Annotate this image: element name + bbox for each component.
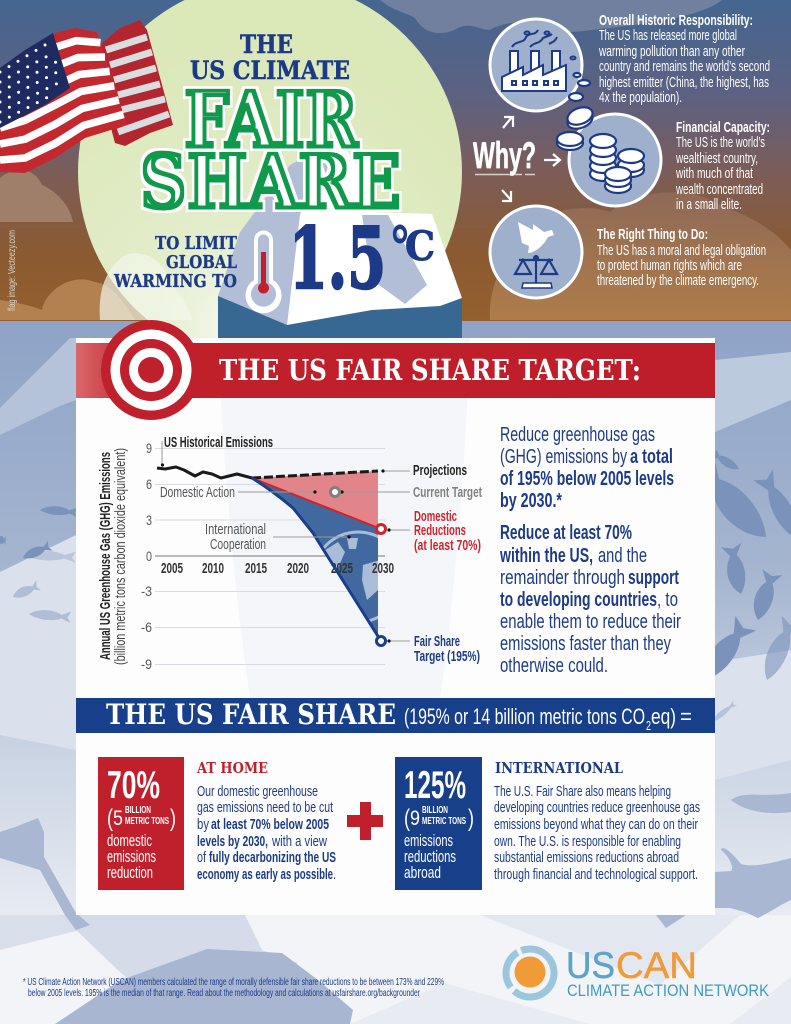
x axis labels: 2020: [287, 560, 309, 577]
chart labels: [160, 435, 482, 665]
text: target description: otherwise could.: [500, 655, 608, 677]
footnote: [23, 977, 444, 999]
leaders: [161, 441, 410, 643]
footnote: * US Climate Action Network (USCAN) members calculated the range of morally defensible fair share reductions to be between 173% and 229%: [23, 977, 444, 988]
text: target description: (GHG) emissions by: [500, 446, 627, 468]
heading band: fair share: THE US FAIR SHARE: [106, 698, 396, 731]
projection dashed line: [252, 471, 378, 478]
title: US CLIMATE: [190, 56, 350, 85]
fish school: [0, 449, 791, 725]
text: at home: AT HOME: [196, 759, 268, 777]
stat box: 125%: 9: [410, 807, 420, 830]
text: at home: economy as early as possible: [197, 866, 333, 883]
stat box: 125%: abroad: [404, 863, 441, 882]
stat box: 70%: METRIC TONS: [125, 816, 169, 827]
text: target description: support: [628, 567, 679, 589]
stat box: 125%: reductions: [404, 847, 456, 866]
chart y axis title: Annual US Greenhouse Gas (GHG) Emissions: [98, 452, 114, 660]
text: at home: at least 70% below 2005: [211, 816, 329, 833]
text: at home: gas emissions need to be cut: [197, 799, 334, 816]
y axis tick labels: -9: [141, 656, 152, 672]
chart labels: Current Target: [413, 485, 482, 501]
markers: [330, 488, 386, 646]
international wedge: [252, 478, 378, 636]
y axis tick labels: 0: [146, 548, 152, 564]
stat box: 70%: 5: [113, 807, 123, 830]
heading band: target: THE US FAIR SHARE TARGET:: [219, 353, 641, 387]
stat box: 70%: ): [170, 805, 176, 832]
heading band: target: [76, 343, 715, 398]
stat box: 70%: reduction: [107, 863, 153, 882]
icon: dove and scales: [490, 206, 582, 298]
icon: thermometer: [246, 231, 282, 313]
text: target description: Reduce at least 70%: [500, 522, 632, 544]
text: at home: by: [197, 816, 209, 833]
domestic reductions line: [252, 478, 381, 529]
text: target description: emissions faster than they: [500, 633, 671, 655]
stat box: 125%: BILLION: [422, 805, 448, 816]
x axis labels: [161, 560, 394, 577]
text: international: [494, 759, 700, 883]
panel: main white card: [76, 338, 715, 915]
text: target description: and the: [598, 545, 647, 567]
text: international: substantial emissions reductions abroad: [494, 849, 679, 866]
text: international: emissions beyond what they can do on their: [494, 816, 698, 833]
flag: [0, 20, 173, 173]
text: target description: within the US,: [499, 545, 593, 567]
text: international: The U.S. Fair Share also means helping: [494, 783, 671, 800]
stat box: 70%: emissions: [107, 847, 156, 866]
text: at home: [196, 759, 336, 883]
chart labels: Projections: [413, 463, 467, 479]
title: C: [405, 223, 435, 270]
background: sea: [0, 321, 791, 1024]
fair share curve: [252, 478, 381, 641]
stat box: 125%: ): [468, 805, 474, 832]
title: TO LIMIT: [155, 233, 238, 254]
heading band: fair share: [76, 698, 715, 733]
whale and turtle silhouettes: [0, 793, 791, 1024]
chart labels: Cooperation: [210, 537, 266, 553]
text: target description: Reduce greenhouse gas: [500, 424, 655, 446]
iceberg: [218, 140, 462, 342]
icon: plus: [347, 802, 383, 840]
text: financial capacity: with much of that: [675, 166, 753, 182]
historical line: [157, 467, 252, 478]
clouds: [0, 0, 791, 320]
chart labels: US Historical Emissions: [164, 435, 273, 451]
globe: [323, 530, 378, 622]
text: target description: by 2030.*: [500, 490, 562, 512]
y axis tick labels: -3: [141, 583, 152, 599]
text: financial capacity: [675, 119, 770, 213]
background: sky: [0, 0, 791, 321]
title: 1.5: [289, 209, 386, 308]
text: at home: with a view: [271, 833, 327, 850]
chart labels: Domestic: [414, 509, 457, 525]
text: international: INTERNATIONAL: [495, 759, 623, 777]
stat box: 125%: 125%: [404, 764, 466, 807]
title: [113, 30, 435, 308]
heading band: fair share: eq): [651, 704, 676, 729]
stat box: 125%: METRIC TONS: [422, 816, 466, 827]
icon: coins: [557, 73, 661, 206]
x axis labels: 2030: [372, 560, 394, 577]
flag front section: [0, 28, 127, 173]
chart labels: Reductions: [414, 523, 466, 539]
stat box: 125%: emissions: [404, 831, 453, 850]
stat box: 70%: (: [107, 805, 113, 832]
text: target description: of 195% below 2005 levels: [500, 468, 674, 490]
text: right thing to do: [597, 226, 766, 289]
title: FAIR: [184, 75, 359, 166]
arrows: [502, 117, 560, 201]
logo: USCAN: US: [566, 945, 615, 986]
logo: USCAN: CAN: [616, 945, 697, 986]
title: SHARE: [140, 138, 401, 226]
text: at home: .: [333, 866, 336, 883]
icon: target: [101, 320, 201, 420]
domestic wedge: [252, 471, 378, 529]
y axis tick labels: 6: [146, 476, 152, 492]
text: at home: of: [197, 849, 207, 866]
stat box: 70%: 70%: [107, 764, 160, 807]
moon: [78, 0, 462, 364]
x axis labels: 2005: [161, 560, 183, 577]
credit: flag image: Vecteezy.com: [7, 230, 18, 311]
heading band: fair share: =: [680, 704, 692, 729]
why label: Why?: [473, 135, 536, 176]
text: target description: [499, 424, 681, 677]
text: target description: a total: [630, 446, 673, 468]
stat box: 70%: [98, 757, 184, 890]
chart: emissions: [98, 435, 482, 672]
stat box: 70%: domestic: [107, 831, 152, 850]
chart y axis title: [98, 448, 129, 665]
stat box: 125%: [395, 757, 482, 890]
chart y axis title: (billion metric tons carbon dioxide equivalent): [113, 448, 129, 665]
title: THE: [240, 30, 293, 59]
text: at home: fully decarbonizing the US: [209, 849, 336, 866]
text: historic responsibility: 4x the population).: [599, 90, 682, 106]
y axis tick labels: 3: [146, 512, 152, 528]
chart labels: Domestic Action: [160, 485, 235, 501]
text: target description: remainder through: [500, 567, 625, 589]
chart labels: International: [205, 522, 266, 538]
logo: USCAN: [506, 945, 770, 1000]
y axis tick labels: [141, 440, 152, 672]
heading band: fair share: (195% or 14 billion metric tons CO: [404, 704, 645, 729]
text: international: through financial and technological support.: [494, 866, 698, 883]
heading band: fair share: 2: [646, 718, 651, 733]
chart labels: (at least 70%): [414, 538, 481, 554]
text: financial capacity: in a small elite.: [676, 197, 742, 213]
x axis labels: 2010: [202, 560, 224, 577]
text: at home: levels by 2030,: [197, 833, 268, 850]
title: °: [389, 214, 411, 282]
icon: factory: [490, 19, 582, 111]
stat box: 125%: (: [404, 805, 410, 832]
title: WARMING TO: [113, 271, 237, 292]
text: target description: enable them to reduce their: [500, 611, 681, 633]
footnote: below 2005 levels. 195% is the median of that range. Read about the methodology and calculations at usfairshare.org/backgrounder: [28, 988, 420, 999]
chart labels: Fair Share: [414, 634, 460, 650]
underwater iceberg tint: [218, 338, 470, 698]
text: target description: to developing countries: [500, 589, 657, 611]
text: target description: , to: [657, 589, 678, 611]
why label: [473, 135, 536, 176]
text: historic responsibility: [598, 12, 770, 106]
flag back section: [100, 20, 173, 146]
stat box: 70%: BILLION: [125, 805, 151, 816]
x axis labels: 2015: [245, 560, 267, 577]
title: GLOBAL: [166, 252, 237, 273]
x axis labels: 2025: [331, 560, 353, 577]
text: international: developing countries reduce greenhouse gas: [494, 799, 700, 816]
text: right thing to do: The Right Thing to Do:: [597, 226, 708, 243]
text: at home: Our domestic greenhouse: [197, 783, 318, 800]
y axis tick labels: -6: [141, 619, 152, 635]
chart labels: Target (195%): [414, 649, 480, 665]
text: international: own. The U.S. is responsible for enabling: [494, 833, 681, 850]
moon cloud: [100, 253, 192, 320]
y axis tick labels: 9: [146, 440, 152, 456]
